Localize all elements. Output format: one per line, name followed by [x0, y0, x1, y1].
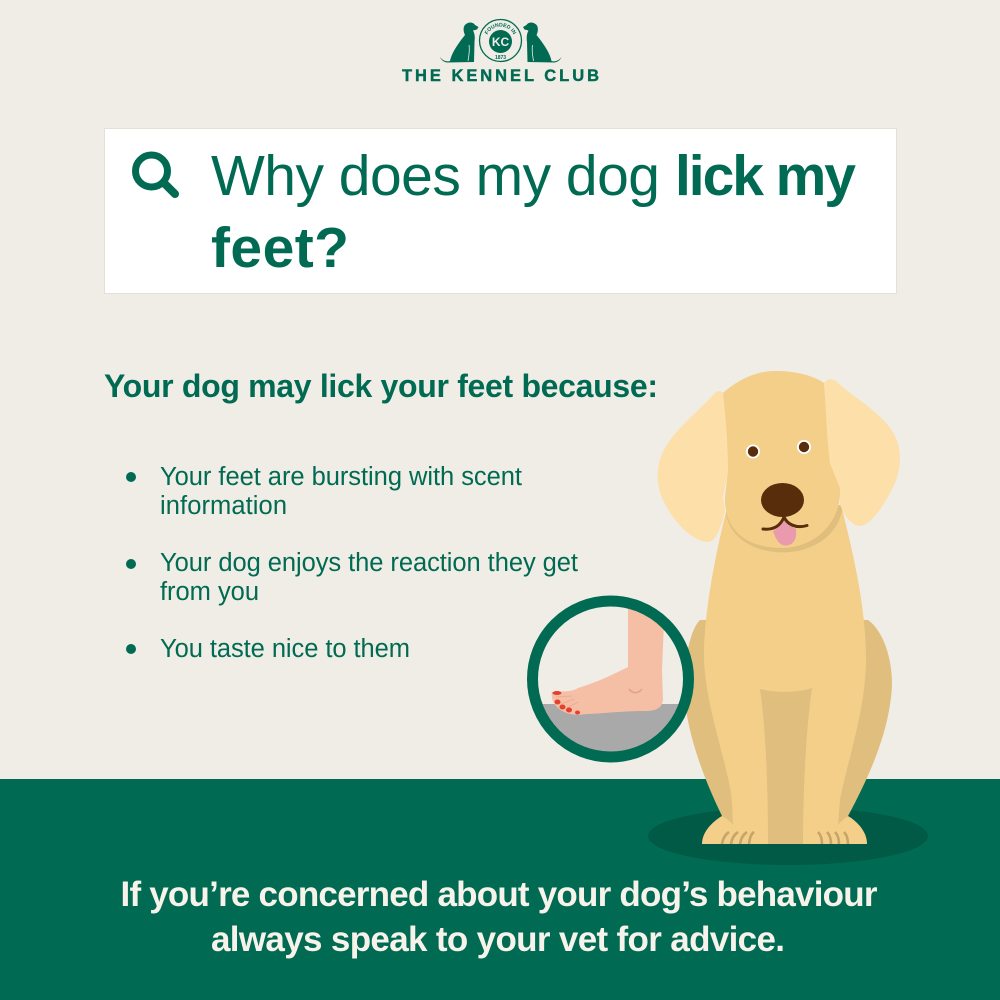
floor	[541, 704, 680, 754]
search box	[104, 128, 896, 294]
right eye	[797, 440, 811, 454]
nose	[761, 483, 804, 517]
icon: right dog	[523, 22, 562, 63]
bullet list	[126, 463, 578, 663]
icon: KC seal: 1873	[495, 55, 506, 61]
right hind paw	[837, 816, 867, 844]
right paw claws	[818, 832, 848, 844]
collar shadow	[726, 505, 843, 552]
footer message	[120, 875, 878, 959]
logo wordmark: THE KENNEL CLUB	[402, 67, 599, 85]
subheading: Your dog may lick your feet because:	[104, 368, 658, 404]
foot	[552, 606, 664, 715]
ring	[532, 601, 688, 757]
icon: KC seal	[478, 18, 522, 62]
chest gap between legs	[760, 688, 812, 844]
bullet 1: Your feet are bursting with scent	[160, 463, 522, 491]
left ear	[658, 391, 728, 542]
title	[211, 144, 856, 280]
inset: foot in circle	[532, 601, 688, 757]
title: feet?	[211, 216, 349, 280]
icon: KC seal: KC	[492, 35, 509, 49]
body and front legs	[704, 505, 866, 844]
bullet 2: from you	[160, 578, 259, 606]
toe lines	[556, 696, 578, 708]
footer message: If you’re concerned about your dog’s behaviour	[120, 875, 878, 914]
left eye	[746, 444, 760, 458]
bullet 3: You taste nice to them	[160, 635, 410, 663]
bullet 1	[126, 463, 522, 520]
circle fill	[532, 601, 688, 757]
logo: The Kennel Club	[402, 18, 599, 85]
right ear	[824, 379, 900, 526]
icon: KC seal: FOUNDED IN	[484, 22, 516, 34]
tongue	[773, 518, 796, 546]
left hind paw	[702, 816, 734, 844]
footer band	[0, 779, 1000, 1000]
ankle crease	[629, 689, 642, 693]
bullet 2: Your dog enjoys the reaction they get	[160, 549, 578, 577]
bullet 2	[126, 549, 578, 606]
footer message: always speak to your vet for advice.	[211, 920, 785, 959]
icon: left dog	[440, 22, 478, 63]
head	[723, 371, 840, 548]
bullet 1: information	[160, 492, 287, 520]
title: lick my	[675, 144, 856, 208]
dog shadow	[648, 807, 928, 865]
mouth	[763, 517, 807, 529]
title: Why does my dog	[211, 144, 660, 208]
search panel	[104, 128, 896, 294]
left paw claws	[722, 832, 754, 844]
haunches	[684, 620, 892, 830]
icon: magnifying glass	[136, 155, 175, 194]
illustration: dog	[658, 371, 900, 844]
toenails	[552, 691, 580, 714]
